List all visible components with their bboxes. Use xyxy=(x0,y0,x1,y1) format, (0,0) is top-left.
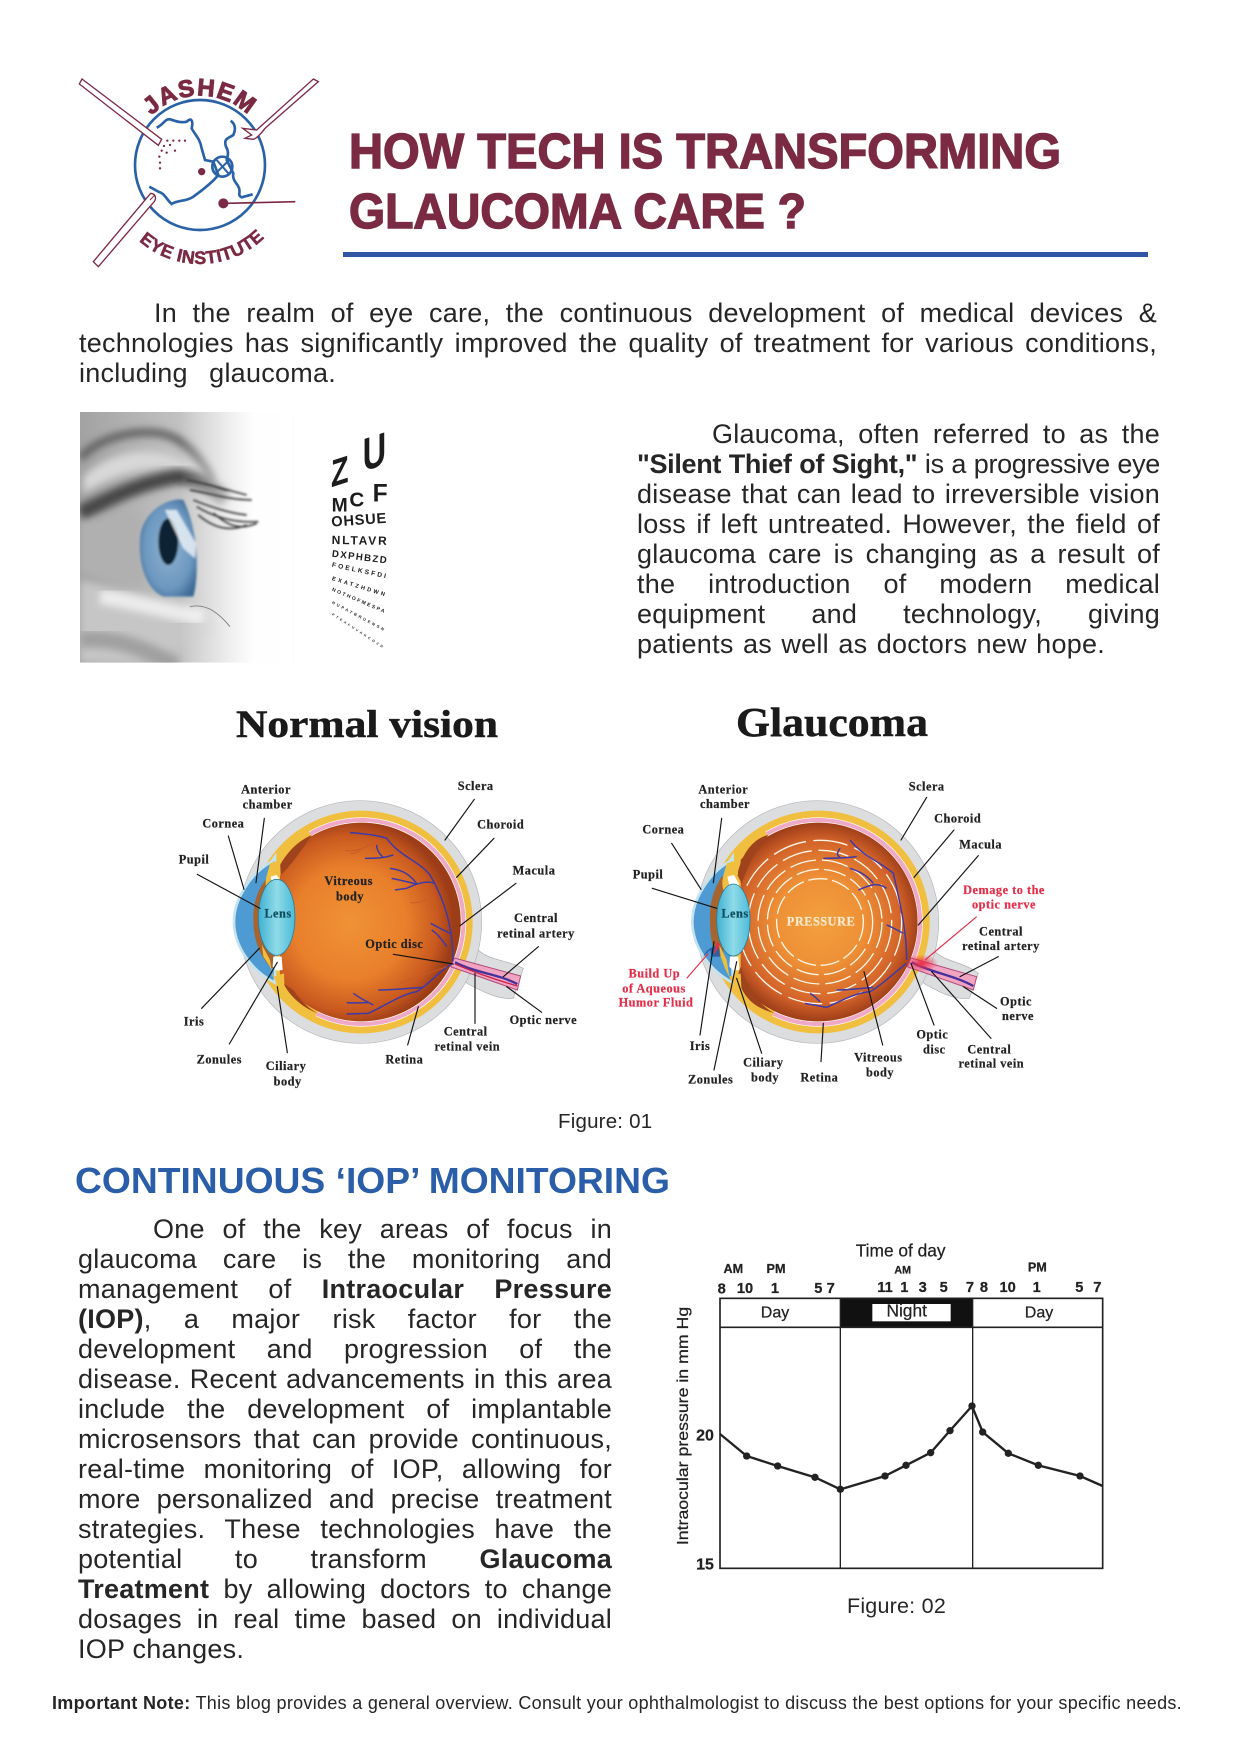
retinal vessels xyxy=(805,840,907,1007)
chart header band: Night xyxy=(886,1301,927,1321)
photo: eye and vision chart: PTEXFUVAKCOZD xyxy=(331,612,384,649)
eye part labels: Retina xyxy=(800,1070,838,1084)
eye part labels: of Aqueous xyxy=(622,981,686,995)
axis labels: 3 xyxy=(919,1280,927,1296)
pressure rings xyxy=(738,840,902,1004)
axis labels: AM xyxy=(723,1262,743,1276)
right paragraph: silent thief of sight: patients as well as doctors new hope. xyxy=(637,629,1105,659)
right paragraph: silent thief of sight: Glaucoma, often referred to as the xyxy=(712,419,1160,449)
pressure curve xyxy=(720,1402,1103,1493)
eye part labels: Macula xyxy=(513,863,555,877)
eye part labels: retinal artery xyxy=(962,939,1040,953)
chart frame xyxy=(720,1298,1103,1568)
photo: eye and vision chart: NOTHOFMESPA xyxy=(331,587,386,615)
right paragraph: silent thief of sight: loss if left untreated. However, the field of xyxy=(637,509,1160,539)
left paragraph: IOP monitoring: include the development of implantable xyxy=(78,1394,612,1424)
logo: Jashem Eye Institute xyxy=(78,78,320,268)
eye part labels: Choroid xyxy=(477,818,524,832)
eye part labels: Anterior xyxy=(698,782,748,796)
eye part labels: nerve xyxy=(1002,1009,1034,1023)
axis labels: 7 xyxy=(827,1281,835,1297)
eye part labels: body xyxy=(866,1066,894,1080)
heading: continuous IOP monitoring: CONTINUOUS ‘IOP’ MONITORING xyxy=(75,1160,670,1201)
eye part labels: Anterior xyxy=(241,782,291,796)
eye part labels: Ciliary xyxy=(266,1059,307,1073)
chart header band: Day xyxy=(761,1304,789,1321)
right paragraph: silent thief of sight: "Silent Thief of Sight," is a progressive eye xyxy=(637,449,1160,479)
axis labels: PM xyxy=(1028,1261,1047,1275)
optic nerve xyxy=(451,958,521,990)
axis labels: 15 xyxy=(696,1556,714,1573)
axis labels: 5 xyxy=(814,1281,822,1297)
eye part labels: Demage to the xyxy=(963,883,1045,897)
eye part labels: Cornea xyxy=(202,817,244,831)
red callout lines xyxy=(687,917,977,978)
left paragraph: IOP monitoring: development and progression of the xyxy=(78,1334,612,1364)
chart header band: Day xyxy=(1025,1304,1053,1321)
axis labels: 20 xyxy=(696,1428,714,1445)
intro paragraph: In the realm of eye care, the continuous development of medical devices & xyxy=(154,298,1157,328)
cornea and anterior chamber xyxy=(234,857,285,1000)
intro paragraph: including glaucoma. xyxy=(79,358,336,388)
right paragraph: silent thief of sight: glaucoma care is changing as a result of xyxy=(637,539,1160,569)
eye part labels: chamber xyxy=(243,798,293,812)
eye part labels: Optic nerve xyxy=(510,1013,577,1027)
eye part labels: Central xyxy=(444,1024,488,1038)
eye part labels: Iris xyxy=(184,1014,204,1028)
left paragraph: IOP monitoring: Treatment by allowing doctors to change xyxy=(78,1574,612,1604)
photo: eye and vision chart: OHSUE xyxy=(331,511,387,531)
eye part labels: disc xyxy=(923,1042,946,1056)
footer note: Important Note: This blog provides a general overview. Consult your ophthalmologist to discuss the best options for your specific needs. xyxy=(52,1693,1182,1713)
sclera and choroid layers xyxy=(696,801,978,1043)
left paragraph: IOP monitoring: strategies. These technologies have the xyxy=(78,1514,612,1544)
eye part labels: Zonules xyxy=(688,1072,733,1086)
axis labels: 5 xyxy=(940,1280,948,1296)
axis labels: 1 xyxy=(900,1280,908,1296)
eye part labels xyxy=(179,779,577,1089)
caption: figure 01: Figure: 01 xyxy=(558,1110,652,1133)
left paragraph: IOP monitoring: glaucoma care is the monitoring and xyxy=(78,1244,612,1274)
optic nerve with damage xyxy=(905,955,977,990)
eye part labels: PRESSURE xyxy=(787,914,855,928)
eye part labels: body xyxy=(751,1071,779,1085)
chart: intraocular pressure over time of day xyxy=(675,1241,1104,1573)
eye part labels: Pupil xyxy=(179,852,209,866)
title: HOW TECH IS TRANSFORMING xyxy=(349,125,1061,179)
eye part labels: Iris xyxy=(690,1039,710,1053)
axis labels: 10 xyxy=(1000,1280,1016,1296)
eye part labels: Ciliary xyxy=(743,1056,784,1070)
lens xyxy=(717,884,750,956)
retinal vessels xyxy=(347,833,453,1014)
axis labels: PM xyxy=(767,1262,785,1276)
photo: eye and vision chart: M xyxy=(332,496,348,517)
eye part labels: Central xyxy=(979,924,1023,938)
eye part labels: Lens xyxy=(721,907,749,921)
axis labels: 8 xyxy=(980,1280,988,1296)
eye part labels: Vitreous xyxy=(324,874,373,888)
left paragraph: IOP monitoring: management of Intraocular Pressure xyxy=(78,1274,612,1304)
axis labels: 7 xyxy=(1093,1280,1101,1296)
left paragraph: IOP monitoring: One of the key areas of focus in xyxy=(153,1214,612,1244)
title xyxy=(349,125,1061,239)
left paragraph: IOP monitoring: microsensors that can provide continuous, xyxy=(78,1424,612,1454)
eye part labels: Optic xyxy=(916,1028,948,1042)
logo: Jashem Eye Institute: EYE INSTITUTE xyxy=(139,228,264,264)
axis labels: Time of day xyxy=(856,1241,946,1261)
eye part labels: retinal vein xyxy=(958,1057,1024,1071)
eye part labels: retinal artery xyxy=(497,927,575,941)
heading: glaucoma: Glaucoma xyxy=(736,699,928,745)
photo: eye and vision chart: NLTAVR xyxy=(332,533,387,548)
eye part labels: retinal vein xyxy=(434,1040,500,1054)
photo: eye and vision chart: HUPATBRUENSN xyxy=(331,600,385,632)
photo: eye and vision chart: C xyxy=(349,489,364,512)
axis labels: 11 xyxy=(877,1280,893,1296)
leader lines xyxy=(197,799,542,1053)
title: GLAUCOMA CARE ? xyxy=(349,185,806,239)
eye part labels: Sclera xyxy=(909,779,945,793)
diagram: normal eye xyxy=(178,779,577,1089)
caption: figure 02: Figure: 02 xyxy=(847,1594,946,1618)
intro paragraph: technologies has significantly improved the quality of treatment for various conditions, xyxy=(79,328,1157,358)
leader lines xyxy=(652,797,998,1070)
eye part labels: Choroid xyxy=(934,811,981,825)
axis labels: 8 xyxy=(718,1282,726,1298)
photo: eye and vision chart: DXPHBZD xyxy=(331,549,387,566)
eye part labels: Central xyxy=(967,1042,1011,1056)
eye part labels: Humor Fluid xyxy=(619,996,693,1010)
eye part labels: Zonules xyxy=(197,1053,242,1067)
right paragraph: silent thief of sight: disease that can lead to irreversible vision xyxy=(637,479,1160,509)
diagram: glaucoma eye xyxy=(618,779,1045,1086)
left paragraph: IOP monitoring: more personalized and precise treatment xyxy=(78,1484,612,1514)
left paragraph: IOP monitoring: real-time monitoring of IOP, allowing for xyxy=(78,1454,612,1484)
eye part labels: Retina xyxy=(385,1053,423,1067)
heading: normal vision: Normal vision xyxy=(236,703,498,746)
photo: eye and vision chart: Z xyxy=(331,448,349,496)
eye part labels: Build Up xyxy=(629,966,680,980)
eye part labels: Vitreous xyxy=(854,1051,903,1065)
photo: eye and vision chart: FOELKSFDI xyxy=(331,562,387,580)
eye part labels: Macula xyxy=(959,837,1002,851)
eye part labels: Lens xyxy=(264,907,292,921)
photo: eye and vision chart: U xyxy=(363,422,386,482)
eye part labels: Central xyxy=(514,911,558,925)
axis labels: 10 xyxy=(737,1281,753,1297)
axis labels: 7 xyxy=(966,1280,974,1296)
left paragraph: IOP monitoring: IOP changes. xyxy=(78,1634,244,1664)
eye part labels: body xyxy=(336,889,364,903)
cornea and anterior chamber xyxy=(692,857,742,993)
photo: eye and vision chart: EXATZHDWN xyxy=(331,576,385,598)
axis labels: AM xyxy=(894,1264,911,1276)
eye part labels: Pupil xyxy=(633,867,663,881)
photo: eye and vision chart xyxy=(80,412,388,663)
title underline xyxy=(343,252,1148,257)
right paragraph: silent thief of sight xyxy=(637,419,1160,659)
eye part labels: Optic disc xyxy=(365,937,423,951)
eye part labels: chamber xyxy=(700,797,750,811)
eye part labels: Cornea xyxy=(642,823,684,837)
left paragraph: IOP monitoring: disease. Recent advancements in this area xyxy=(78,1364,612,1394)
axis labels: 5 xyxy=(1075,1280,1083,1296)
axis labels: 1 xyxy=(771,1281,779,1297)
left paragraph: IOP monitoring: dosages in real time based on individual xyxy=(78,1604,612,1634)
eye part labels: Sclera xyxy=(458,779,494,793)
left paragraph: IOP monitoring xyxy=(78,1214,612,1664)
axis labels: 1 xyxy=(1033,1280,1041,1296)
eye part labels xyxy=(619,779,1045,1086)
left paragraph: IOP monitoring: potential to transform Glaucoma xyxy=(78,1544,612,1574)
eye part labels: Optic xyxy=(1000,994,1032,1008)
right paragraph: silent thief of sight: equipment and technology, giving xyxy=(637,599,1160,629)
left paragraph: IOP monitoring: (IOP), a major risk factor for the xyxy=(78,1304,612,1334)
lens xyxy=(258,879,295,955)
eye part labels: body xyxy=(274,1075,302,1089)
sclera and choroid layers xyxy=(239,801,523,1043)
photo: eye and vision chart: F xyxy=(373,481,388,508)
chart header band xyxy=(761,1298,1053,1327)
right paragraph: silent thief of sight: the introduction of modern medical xyxy=(637,569,1160,599)
axis labels xyxy=(675,1241,1101,1573)
eye part labels: optic nerve xyxy=(972,898,1036,912)
axis labels: Intraocular pressure in mm Hg xyxy=(675,1307,692,1545)
intro paragraph xyxy=(79,298,1157,388)
logo: Jashem Eye Institute: JASHEM xyxy=(144,78,258,114)
